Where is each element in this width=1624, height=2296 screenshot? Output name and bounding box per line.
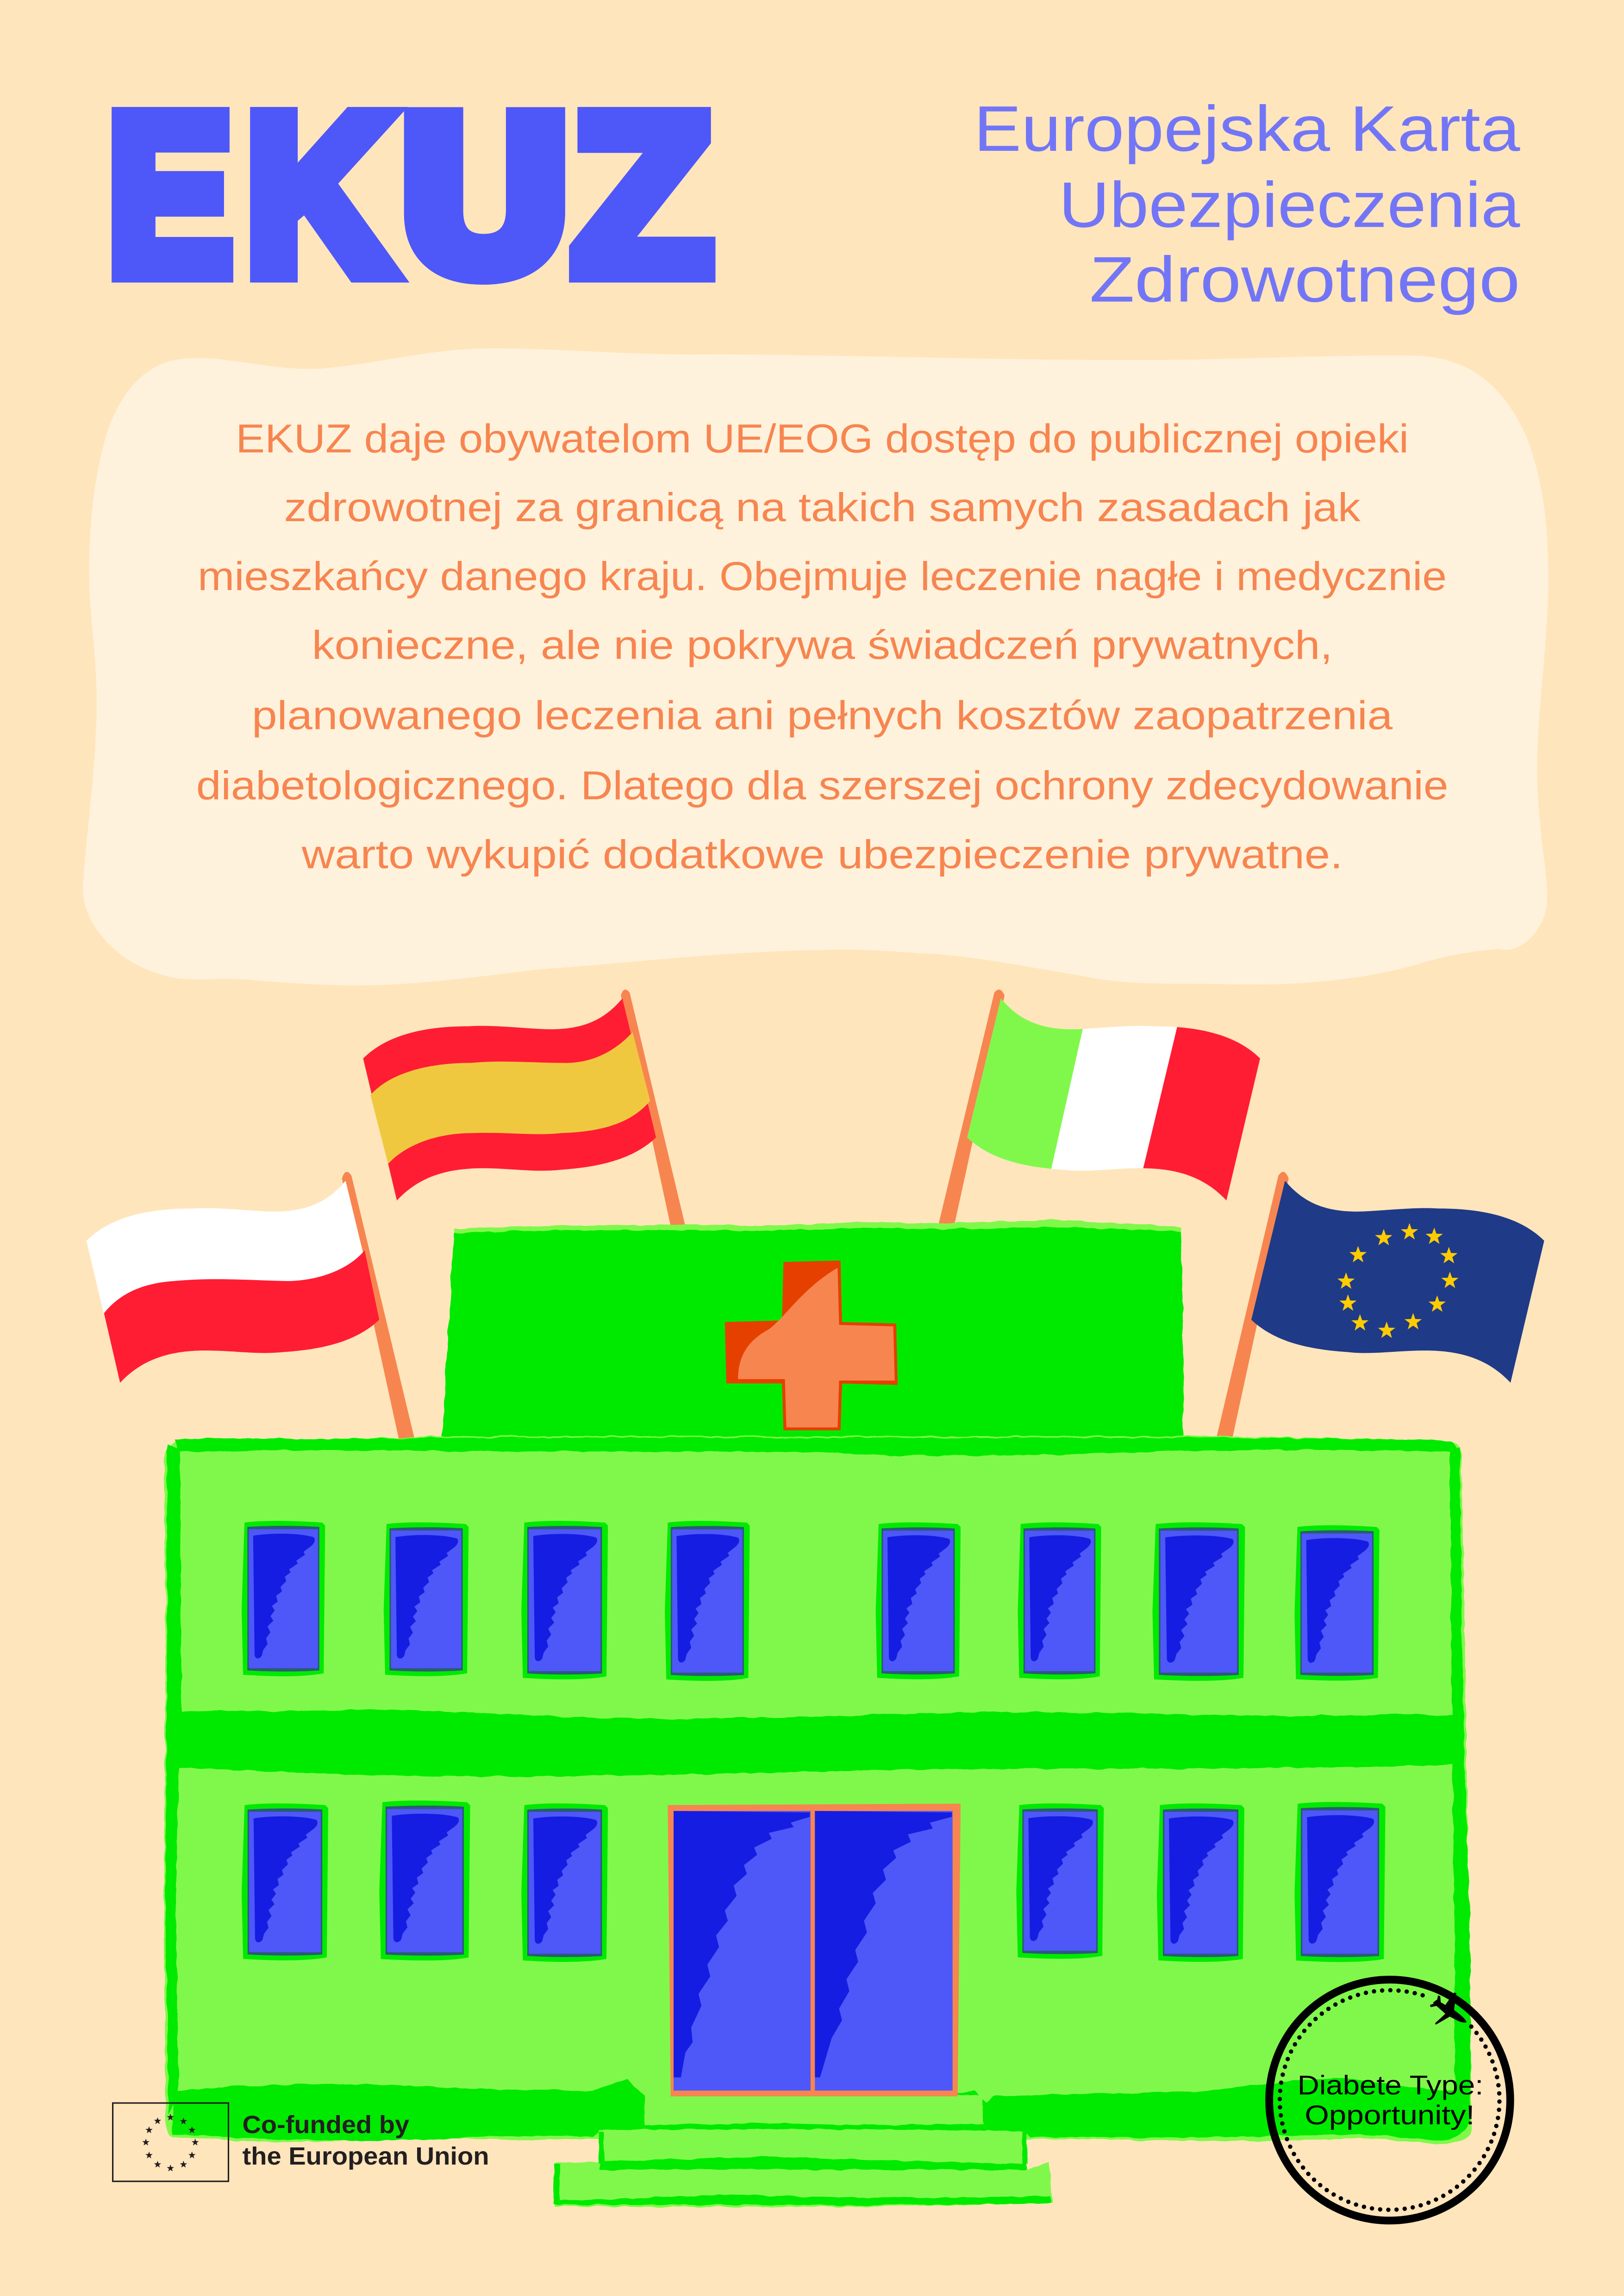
panel: description blob — [83, 348, 1548, 985]
building middle band — [167, 1710, 1464, 1776]
windows: lower row — [242, 1800, 1386, 1962]
text block: description: konieczne, ale nie pokrywa świadczeń prywatnych, — [312, 623, 1333, 668]
title: EKUZ: U — [404, 74, 565, 316]
title: EKUZ: E — [107, 68, 232, 320]
icon: medical cross — [725, 1261, 898, 1431]
stamp text — [1298, 2071, 1483, 2130]
flag: Poland — [87, 1181, 379, 1383]
icon: plane — [1430, 1992, 1467, 2025]
building right edge — [1450, 1446, 1470, 2123]
text block: description: planowanego leczenia ani pełnych kosztów zaopatrzenia — [252, 693, 1393, 738]
logo text: the European Union — [243, 2142, 489, 2170]
door — [668, 1804, 961, 2097]
stamp text: Opportunity! — [1305, 2100, 1474, 2130]
flag: Italy — [967, 999, 1260, 1201]
flag pole: Poland — [342, 1172, 415, 1442]
flag: European Union — [1251, 1181, 1544, 1383]
building bottom band right — [956, 2078, 1469, 2140]
subtitle: Europejska Karta Ubezpieczenia Zdrowotnego: Europejska Karta — [974, 93, 1520, 165]
logo text — [243, 2111, 489, 2170]
text block: description: warto wykupić dodatkowe ubezpieczenie prywatne. — [301, 832, 1343, 877]
logo text: Co-funded by — [243, 2111, 409, 2139]
building bottom band left — [173, 2079, 671, 2141]
text block: description: mieszkańcy danego kraju. Obejmuje leczenie nagłe i medycznie — [198, 554, 1447, 599]
text block: description — [196, 417, 1448, 877]
hospital building — [164, 1220, 1472, 2207]
logo: co-funded by the European Union — [113, 2103, 489, 2181]
steps — [554, 2095, 1053, 2207]
building upper block top rim — [454, 1220, 1181, 1237]
subtitle: Europejska Karta Ubezpieczenia Zdrowotnego — [974, 93, 1520, 316]
flag: Spain — [363, 998, 656, 1201]
windows: upper row — [242, 1521, 1380, 1681]
text block: description: zdrowotnej za granicą na takich samych zasadach jak — [284, 485, 1361, 530]
title: EKUZ: K — [246, 68, 392, 320]
subtitle: Europejska Karta Ubezpieczenia Zdrowotnego: Ubezpieczenia — [1059, 169, 1520, 241]
subtitle: Europejska Karta Ubezpieczenia Zdrowotnego: Zdrowotnego — [1089, 244, 1520, 316]
title: EKUZ — [107, 68, 712, 320]
flag pole: Italy — [937, 989, 1005, 1230]
building main body — [164, 1436, 1472, 2144]
flag pole: EU — [1215, 1172, 1289, 1442]
text block: description: EKUZ daje obywatelom UE/EOG dostęp do publicznej opieki — [236, 417, 1409, 461]
text block: description: diabetologicznego. Dlatego dla szerszej ochrony zdecydowanie — [196, 763, 1448, 808]
flag pole: Spain — [621, 989, 686, 1230]
building upper block — [442, 1227, 1183, 1442]
title: EKUZ: Z — [573, 68, 712, 320]
logo box with EU stars — [113, 2103, 228, 2181]
building left edge — [165, 1444, 181, 2116]
building top edge — [174, 1437, 1460, 1456]
stamp: Diabete Type: Opportunity! — [1269, 1979, 1510, 2221]
stamp text: Diabete Type: — [1298, 2071, 1483, 2101]
